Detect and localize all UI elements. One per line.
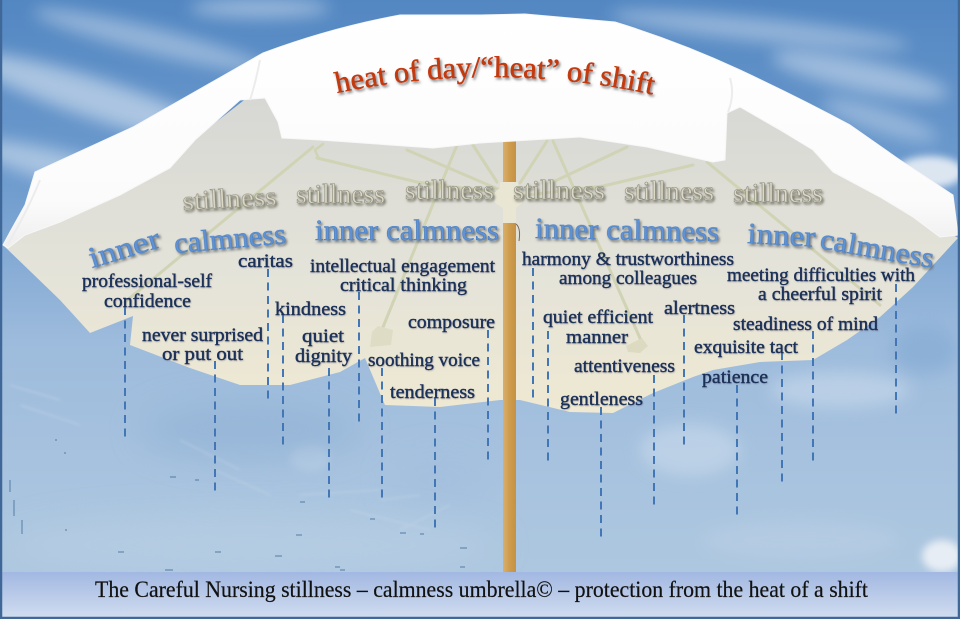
attribute labels: harmony & trustworthiness xyxy=(522,250,734,270)
stillness words: stillness xyxy=(513,175,605,205)
attribute labels: professional-self xyxy=(82,272,213,292)
attribute labels: among colleagues xyxy=(559,269,697,289)
stillness words: stillness xyxy=(182,181,277,216)
canopy shading xyxy=(8,60,732,244)
inner calmness words: calmness xyxy=(173,217,287,260)
attribute labels: kindness xyxy=(275,300,346,320)
attribute labels xyxy=(82,250,915,410)
inner calmness words: inner xyxy=(747,217,816,254)
rib joint right xyxy=(626,338,648,353)
attribute labels: a cheerful spirit xyxy=(758,285,883,305)
attribute labels: alertness xyxy=(664,299,735,319)
inner calmness words: inner xyxy=(84,222,164,275)
umbrella pole xyxy=(503,140,516,572)
canopy underside xyxy=(3,80,958,413)
attribute labels: tenderness xyxy=(390,383,475,403)
attribute labels: soothing voice xyxy=(368,351,480,371)
inner calmness words: calmness xyxy=(818,222,937,275)
attribute labels: meeting difficulties with xyxy=(727,266,915,286)
inner calmness words: inner calmness xyxy=(535,212,719,248)
white canopy top xyxy=(3,14,958,248)
dashed leader lines xyxy=(125,268,896,538)
rib joint left xyxy=(370,326,393,347)
attribute labels: intellectual engagement xyxy=(310,257,496,277)
attribute labels: caritas xyxy=(238,252,293,272)
stillness words: stillness xyxy=(733,178,823,208)
attribute labels: critical thinking xyxy=(340,276,467,296)
stillness words: stillness xyxy=(405,175,494,205)
footer caption band xyxy=(0,572,960,617)
stillness words xyxy=(182,175,823,216)
umbrella ribs xyxy=(125,141,880,345)
attribute labels: steadiness of mind xyxy=(733,315,879,335)
pole hub xyxy=(495,182,522,223)
attribute labels: quiet efficient xyxy=(543,308,654,328)
attribute labels: manner xyxy=(566,328,628,348)
attribute labels: quiet xyxy=(302,327,345,347)
attribute labels: patience xyxy=(702,368,768,388)
attribute labels: gentleness xyxy=(560,390,643,410)
stillness words: stillness xyxy=(296,179,385,209)
attribute labels: composure xyxy=(408,313,495,333)
attribute labels: dignity xyxy=(295,347,353,367)
attribute labels: attentiveness xyxy=(574,357,675,377)
caption text: The Careful Nursing stillness – calmness umbrella© – protection from the heat of a shift xyxy=(95,577,869,602)
inner calmness words xyxy=(84,212,937,275)
attribute labels: exquisite tact xyxy=(694,338,799,358)
pole wire xyxy=(516,224,520,241)
inner calmness words: inner calmness xyxy=(315,214,499,247)
stillness words: stillness xyxy=(624,176,714,206)
heading: heat of day / heat of shift: heat of day/“heat” of shift xyxy=(333,56,658,98)
attribute labels: or put out xyxy=(162,345,244,365)
attribute labels: never surprised xyxy=(142,326,264,346)
attribute labels: confidence xyxy=(104,292,191,312)
